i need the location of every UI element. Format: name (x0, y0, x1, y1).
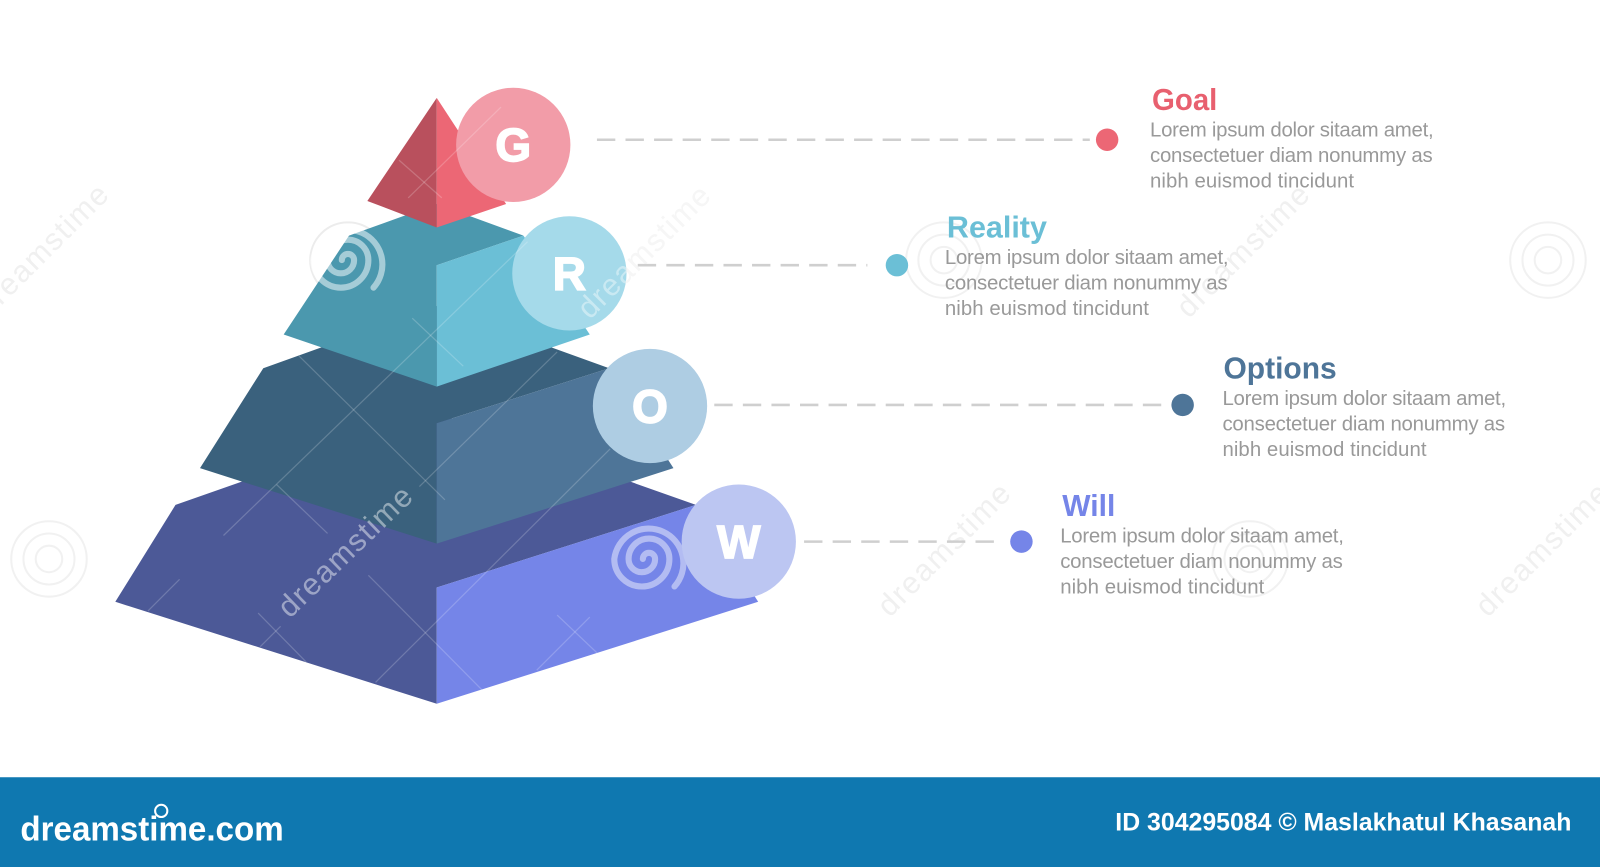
faint background watermarks: dreamstime (871, 476, 1017, 623)
text block: Goal: nibh euismod tincidunt (1150, 171, 1354, 193)
text block: Reality: Reality (947, 211, 1047, 245)
circle badges (456, 88, 796, 599)
text block: Will (1060, 489, 1344, 599)
text block: Will: nibh euismod tincidunt (1060, 577, 1265, 599)
badge O (593, 349, 707, 463)
faint background watermarks (0, 178, 1600, 623)
connector: Options (714, 394, 1194, 416)
text block: Options: Lorem ipsum dolor sitaam amet, (1222, 388, 1506, 410)
badge G: G (495, 119, 531, 171)
pyramid tier: Will (115, 413, 758, 704)
text block: Reality (945, 211, 1229, 320)
text block: Will: Will (1062, 489, 1115, 523)
badge W: W (717, 516, 761, 568)
footer bar (0, 777, 1600, 867)
watermark text on Reality badge: dreamstime (571, 179, 717, 325)
pyramid (115, 98, 758, 704)
text block: Goal (1150, 83, 1434, 193)
text block: Goal: Goal (1152, 83, 1217, 117)
text block: Reality: nibh euismod tincidunt (945, 298, 1149, 320)
badge O: O (632, 380, 668, 432)
badge R (512, 216, 627, 330)
connector: Reality (638, 254, 908, 276)
connector: Will (804, 530, 1033, 553)
badge G (456, 88, 570, 202)
watermark cross lines (148, 107, 610, 690)
text block: Options: nibh euismod tincidunt (1222, 439, 1427, 461)
text block: Options: consectetuer diam nonummy as (1222, 413, 1505, 435)
faint background watermarks: dreamstime (571, 179, 717, 325)
text block: Will: Lorem ipsum dolor sitaam amet, (1060, 526, 1344, 548)
text block: Reality: consectetuer diam nonummy as (945, 273, 1228, 295)
text block: Options (1222, 351, 1506, 461)
text block: Goal: Lorem ipsum dolor sitaam amet, (1150, 120, 1434, 142)
badge W (682, 484, 796, 599)
pyramid tier: Goal (367, 98, 506, 227)
pyramid tier: Reality (284, 204, 590, 387)
pyramid tier: Options (200, 306, 673, 544)
text block: Goal: consectetuer diam nonummy as (1150, 145, 1433, 167)
spiral watermark on Reality tier (313, 230, 382, 288)
text block: Options: Options (1223, 351, 1337, 385)
footer credit: ID 304295084 © Maslakhatul Khasanah (1115, 808, 1571, 836)
badge R: R (553, 248, 586, 300)
text block: Will: consectetuer diam nonummy as (1060, 551, 1343, 573)
text block: Reality: Lorem ipsum dolor sitaam amet, (945, 247, 1229, 269)
spiral watermark on Will tier (614, 529, 683, 586)
watermark text on pyramid: dreamstime (271, 479, 419, 624)
footer logo: dreamstime.com (20, 810, 284, 848)
connector: Goal (597, 129, 1118, 151)
faint background watermarks: dreamstime (1170, 178, 1316, 324)
